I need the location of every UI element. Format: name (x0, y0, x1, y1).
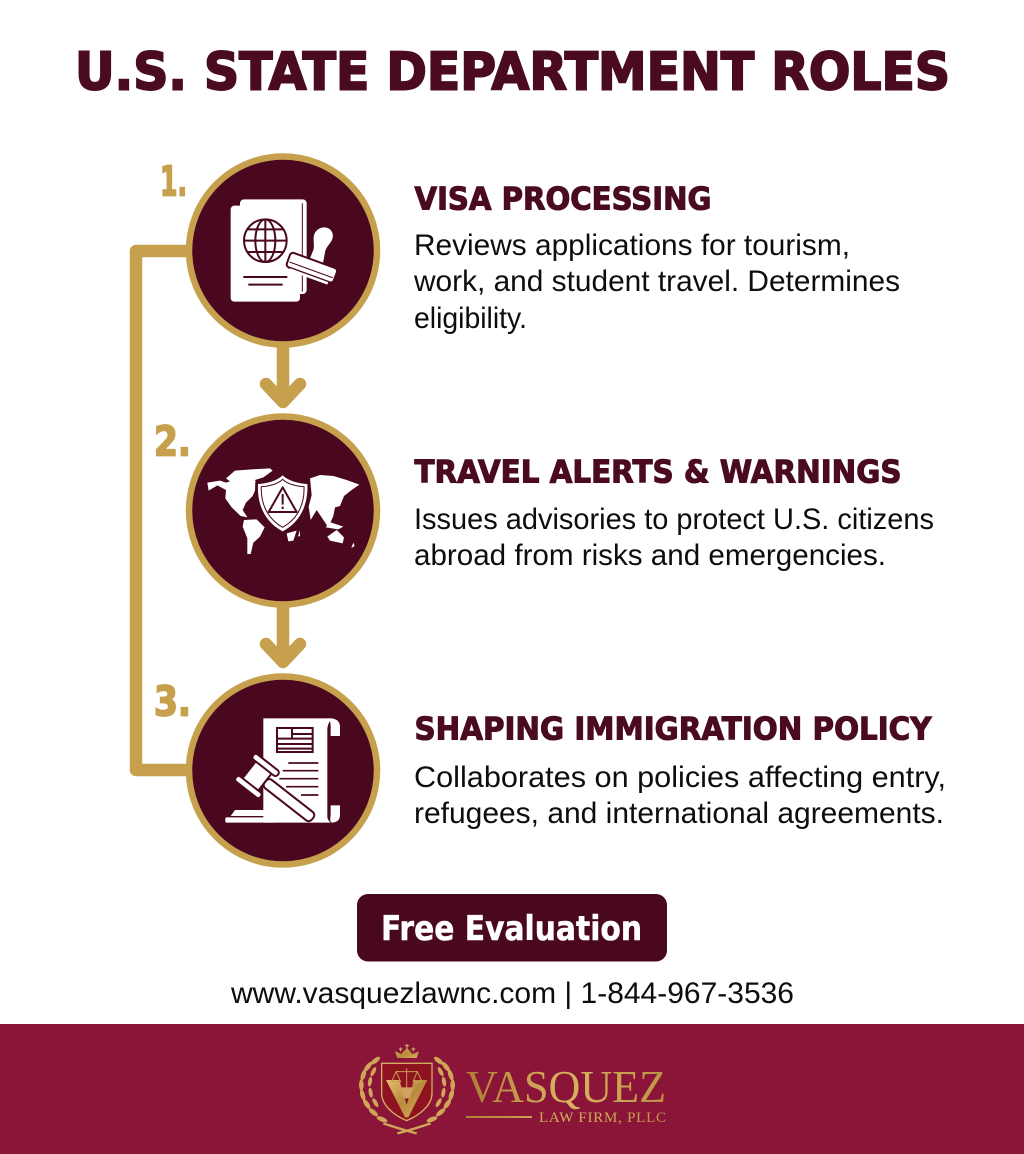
heading: travel alerts and warnings: TRAVEL ALERTS & WARNINGS (414, 454, 902, 490)
heading: visa processing: VISA PROCESSING (414, 182, 712, 218)
text: visa processing description: Reviews applications for tourism, (414, 229, 850, 262)
icon: gavel and policy document (225, 718, 340, 823)
text: immigration policy description: refugees, and international agreements. (414, 797, 944, 830)
text: immigration policy description: Collaborates on policies affecting entry, (414, 761, 946, 794)
contact line: www.vasquezlawnc.com | 1-844-967-3536 (230, 977, 794, 1010)
step 3 circle with gavel icon (189, 676, 377, 864)
button: free evaluation (357, 894, 667, 962)
heading: shaping immigration policy: SHAPING IMMIGRATION POLICY (414, 712, 933, 748)
step 1 circle with passport icon (189, 156, 377, 344)
title: U.S. STATE DEPARTMENT ROLES (75, 42, 950, 102)
laurel: right branch (426, 1055, 455, 1124)
button: free evaluation: Free Evaluation (381, 909, 642, 949)
text: immigration policy description (414, 761, 946, 830)
text: law firm, PLLC: LAW FIRM, PLLC (539, 1110, 666, 1126)
footer band (0, 1024, 1024, 1154)
step 2 circle with map icon (189, 416, 377, 604)
text: travel alerts description: abroad from risks and emergencies. (414, 539, 886, 572)
text: visa processing description: work, and student travel. Determines (413, 265, 900, 298)
text: travel alerts description (414, 503, 934, 572)
panel: immigration policy text (414, 712, 946, 830)
icon: passport and stamp (231, 199, 338, 302)
text: VASQUEZ: VASQUEZ (466, 1062, 666, 1112)
connector: bracket from step 1 to step 3 (136, 251, 190, 770)
text: visa processing description (413, 229, 900, 335)
logo rule (466, 1116, 532, 1118)
panel: visa processing text (413, 182, 900, 335)
arrow: step 1 to step 2 (266, 345, 300, 402)
step 2 number: 2. (154, 418, 191, 466)
text: visa processing description: eligibility. (414, 302, 527, 335)
logo: Vasquez Law Firm (359, 1044, 666, 1133)
icon: crest (359, 1044, 455, 1133)
step 3 number: 3. (154, 678, 191, 726)
arrow: step 2 to step 3 (266, 605, 300, 662)
step 1 number: 1. (160, 158, 187, 206)
text: travel alerts description: Issues advisories to protect U.S. citizens (414, 503, 934, 536)
laurel: left branch (359, 1055, 388, 1124)
panel: travel alerts text (414, 454, 934, 572)
icon: world map with warning shield (207, 468, 359, 554)
